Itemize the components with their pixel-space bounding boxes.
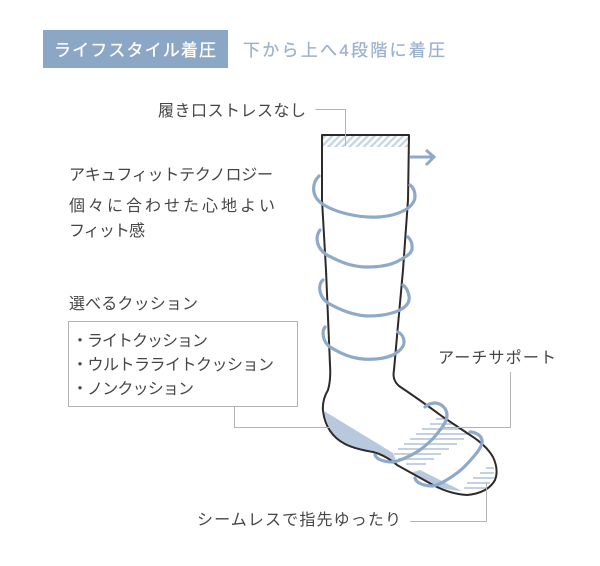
label: seamless toe: シームレスで指先ゆったり <box>197 511 401 529</box>
arch support stripes <box>394 419 468 464</box>
title badge: ライフスタイル着圧 <box>54 41 216 60</box>
cushion list box: ・ウルトラライトクッション <box>72 356 274 374</box>
foot band arch <box>375 403 447 462</box>
subtitle: 下から上へ4段階に着圧 <box>243 41 445 60</box>
cushion heading: 選べるクッション <box>69 295 198 313</box>
label: Accufit technology: アキュフィットテクノロジー <box>69 166 273 184</box>
label: cushion choice <box>68 295 330 428</box>
compression ring 4 <box>323 327 404 359</box>
label: cuff: 履き口ストレスなし <box>158 102 306 120</box>
hatched cuff area <box>323 136 408 147</box>
title badge <box>43 30 228 68</box>
toe stripes <box>464 468 494 488</box>
label: arch support: アーチサポート <box>438 349 556 367</box>
cushion list box: ・ノンクッション <box>72 380 194 398</box>
label: arch support <box>438 349 556 428</box>
foot band toe <box>415 432 482 486</box>
label: cuff <box>158 102 346 146</box>
compression ring 1 <box>314 176 415 217</box>
compression ring 2 <box>317 230 412 267</box>
compression ring 3 <box>320 280 409 316</box>
arrow <box>410 150 434 165</box>
sock outline <box>322 135 497 495</box>
label: Accufit technology <box>69 166 275 240</box>
label: seamless toe <box>197 482 486 529</box>
blue heel sole panel <box>324 411 398 465</box>
label: Accufit technology: 個々に合わせた心地よい <box>69 197 275 215</box>
label: Accufit technology: フィット感 <box>69 222 145 240</box>
header <box>43 30 445 68</box>
blue toe sole panel <box>410 470 462 491</box>
cushion list box: ・ライトクッション <box>72 332 208 350</box>
cushion list box <box>68 322 298 406</box>
sock diagram <box>314 135 497 495</box>
